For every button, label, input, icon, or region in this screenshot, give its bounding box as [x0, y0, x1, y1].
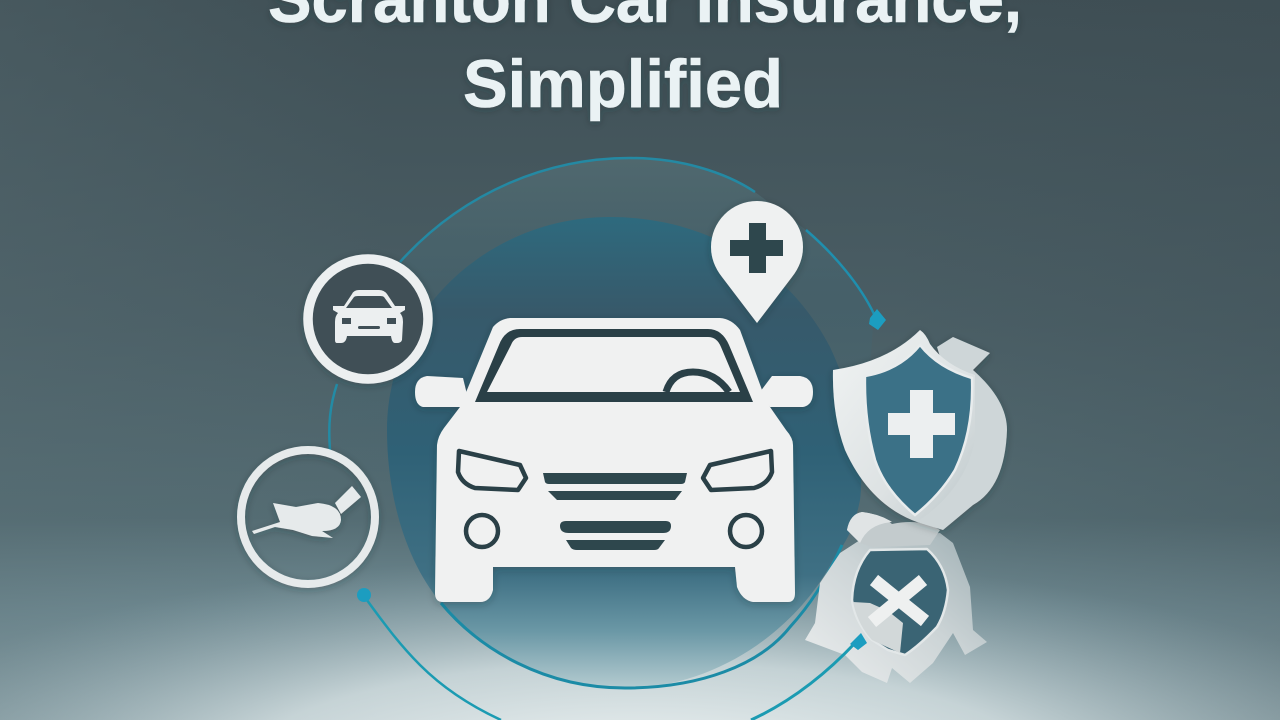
x mark	[872, 580, 925, 622]
connecting arc: left side	[329, 384, 337, 450]
connecting arc: bottom sweep with dot	[357, 588, 501, 720]
central teal disc	[387, 217, 861, 688]
shield outer	[833, 330, 975, 522]
knot	[847, 512, 940, 547]
window	[852, 549, 948, 655]
shield plus	[888, 390, 955, 458]
icon: small car in ring	[308, 259, 428, 379]
fog lights	[466, 515, 498, 547]
shield back ribbon	[917, 337, 1007, 530]
steering wheel	[666, 372, 729, 392]
icon: location pin with plus	[711, 201, 803, 323]
connecting arc: arrow into broken shield	[751, 633, 867, 720]
outer halo circle	[330, 158, 874, 500]
right headlight	[703, 451, 772, 490]
car body	[435, 318, 795, 602]
upper grille	[543, 473, 687, 484]
teal arc: disc lower edge	[441, 545, 842, 688]
shield inner	[865, 345, 972, 515]
right mirror	[760, 376, 813, 407]
title	[268, 0, 1022, 122]
ribbon body	[805, 533, 987, 683]
windshield	[475, 329, 753, 402]
lower grille	[560, 521, 671, 533]
shield with plus	[833, 330, 1007, 530]
broken shield with x	[805, 512, 987, 683]
connecting arc: top to shield	[400, 158, 886, 330]
title: Simplified	[463, 46, 783, 122]
main car illustration	[415, 318, 813, 602]
left headlight	[458, 451, 526, 490]
grey area in window	[853, 602, 903, 653]
icon: handshake in ring	[241, 450, 375, 584]
left mirror	[415, 376, 470, 407]
